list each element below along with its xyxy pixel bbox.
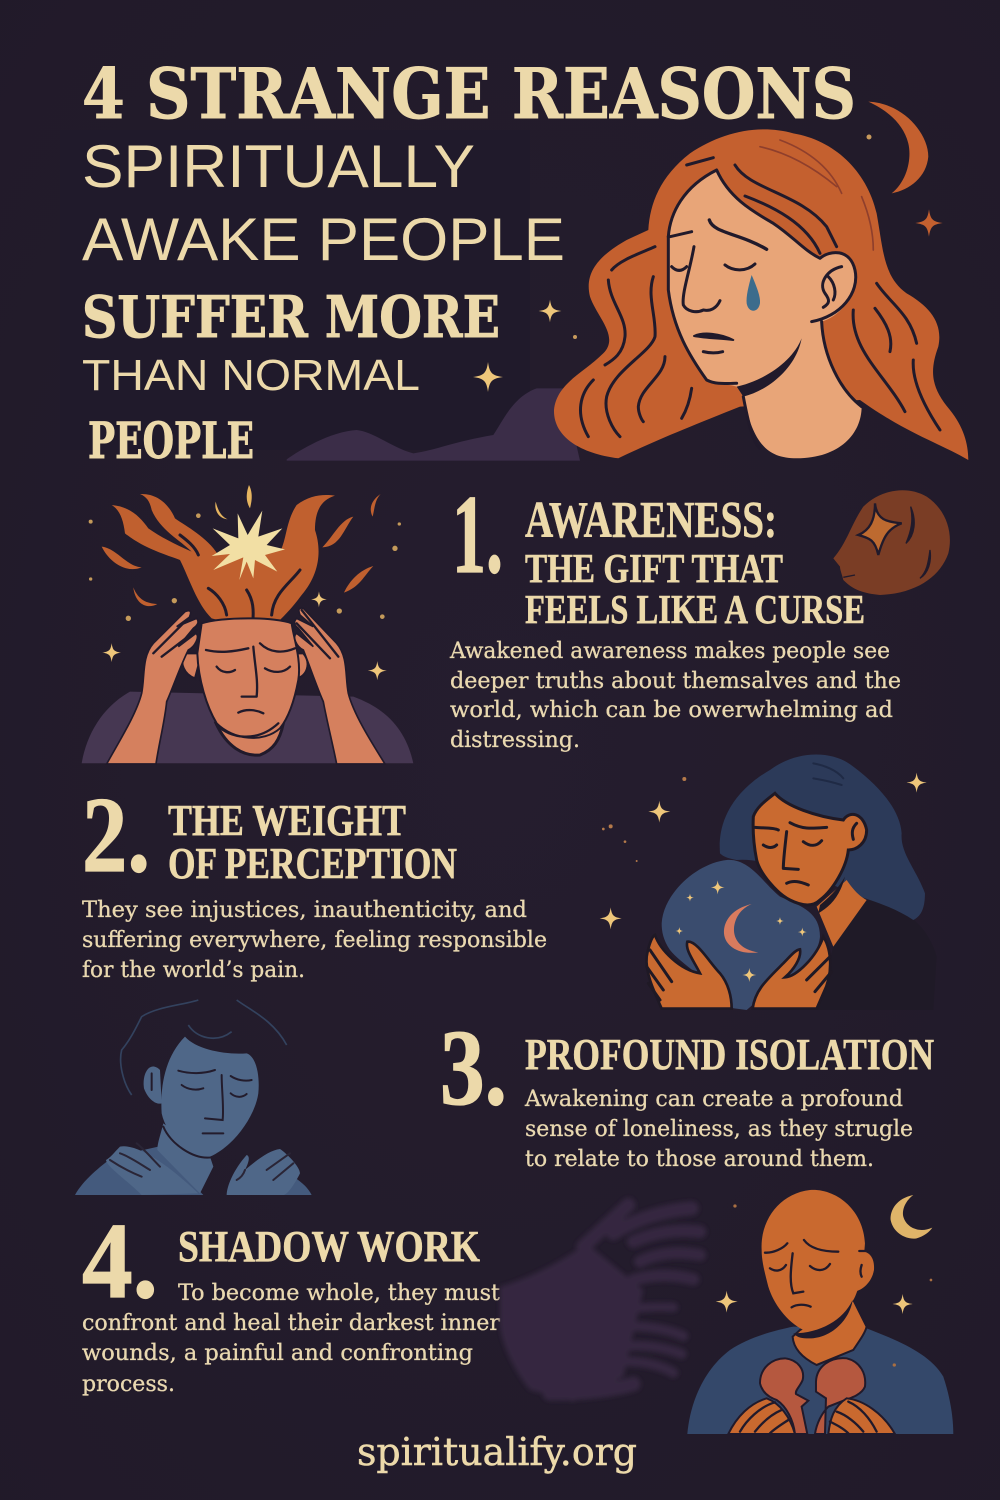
- body 1: Awakened awareness makes people see: [449, 639, 890, 664]
- body 2: for the world’s pain.: [82, 958, 305, 983]
- heading 2: [168, 796, 457, 888]
- heading 4: SHADOW WORK: [178, 1222, 480, 1271]
- number 4: 4.: [82, 1202, 158, 1321]
- body 1: deeper truths about themsalves and the: [450, 669, 901, 694]
- hands: [107, 611, 198, 764]
- illustration: woman holding cosmos: [600, 755, 937, 1010]
- title: SPIRITUALLY: [82, 133, 475, 200]
- flames: [112, 494, 335, 624]
- moon: [891, 1195, 932, 1239]
- heading 1: THE GIFT THAT: [525, 545, 783, 591]
- shoulders: [75, 1147, 312, 1195]
- neck: [157, 1123, 213, 1193]
- heading 2: OF PERCEPTION: [168, 839, 457, 888]
- body 4: process.: [82, 1372, 175, 1397]
- title: 4 STRANGE REASONS: [82, 54, 856, 135]
- heading 1: AWARENESS:: [525, 492, 777, 549]
- shirt: [82, 692, 413, 763]
- illustration: isolated person: [75, 1000, 312, 1195]
- tear: [747, 275, 760, 311]
- stars: [102, 643, 121, 662]
- flame sparks: [102, 494, 381, 606]
- heading 1: [525, 492, 865, 632]
- body 2: They see injustices, inauthenticity, and: [82, 898, 527, 923]
- hands: [646, 935, 732, 1009]
- chin shadow: [737, 338, 802, 397]
- body 3: [524, 1087, 913, 1172]
- body 1: [449, 639, 901, 753]
- body 4: To become whole, they must: [178, 1281, 500, 1306]
- footer: spiritualify.org: [357, 1430, 637, 1474]
- title: SUFFER MORE: [82, 284, 500, 351]
- body 4: [82, 1281, 500, 1397]
- body 3: to relate to those around them.: [525, 1147, 874, 1172]
- neck: [216, 723, 283, 755]
- illustration: crying woman: [554, 102, 968, 460]
- moon: [868, 102, 928, 193]
- body 3: sense of loneliness, as they strugle: [525, 1117, 913, 1142]
- title: [82, 54, 856, 470]
- number 2: 2.: [82, 776, 150, 895]
- body 2: [82, 898, 547, 983]
- orb: [662, 860, 820, 1010]
- crescent in orb: [724, 904, 758, 953]
- neck: [793, 1300, 867, 1365]
- broken heart: [760, 1358, 808, 1434]
- ear: [855, 1251, 874, 1292]
- neck: [817, 880, 867, 947]
- hands: [728, 1398, 795, 1434]
- body 4: confront and heal their darkest inner: [82, 1311, 500, 1336]
- heading 1: FEELS LIKE A CURSE: [525, 586, 865, 632]
- face: [753, 793, 867, 905]
- head: [762, 1190, 865, 1331]
- number 3: 3.: [440, 1009, 507, 1128]
- body 2: suffering everywhere, feeling responsible: [82, 928, 547, 953]
- illustration: bald man with broken heart: [687, 1190, 953, 1434]
- decorative cloud: [287, 388, 580, 461]
- face: [161, 1037, 259, 1157]
- stars around woman: [473, 134, 943, 392]
- heading 2: THE WEIGHT: [168, 796, 406, 845]
- shirt: [687, 1327, 953, 1434]
- body 3: Awakening can create a profound: [524, 1087, 903, 1112]
- number 1: 1.: [452, 473, 503, 597]
- illustration: head with flames: [82, 485, 413, 764]
- ears: [182, 653, 308, 678]
- body 1: world, which can be owerwhelming ad: [450, 698, 893, 723]
- stars: [716, 1291, 913, 1314]
- body 4: wounds, a painful and confronting: [82, 1341, 473, 1366]
- title: AWAKE PEOPLE: [82, 206, 565, 273]
- body 1: distressing.: [450, 728, 580, 753]
- hair outline: [121, 1000, 287, 1095]
- face and neck: [668, 170, 862, 458]
- hair: [554, 129, 968, 460]
- title: PEOPLE: [88, 411, 254, 470]
- burst star: [212, 511, 285, 580]
- hair: [720, 755, 925, 920]
- small brown face icon: [833, 490, 950, 595]
- title: THAN NORMAL: [82, 351, 420, 400]
- ear: [144, 1067, 162, 1104]
- illustration: shadow hands: [500, 1205, 700, 1402]
- head: [197, 618, 299, 738]
- facial features: [670, 220, 842, 353]
- hair lines: [580, 158, 940, 448]
- stars: [600, 773, 927, 982]
- hands: [106, 1146, 198, 1195]
- dark body: [817, 900, 937, 1010]
